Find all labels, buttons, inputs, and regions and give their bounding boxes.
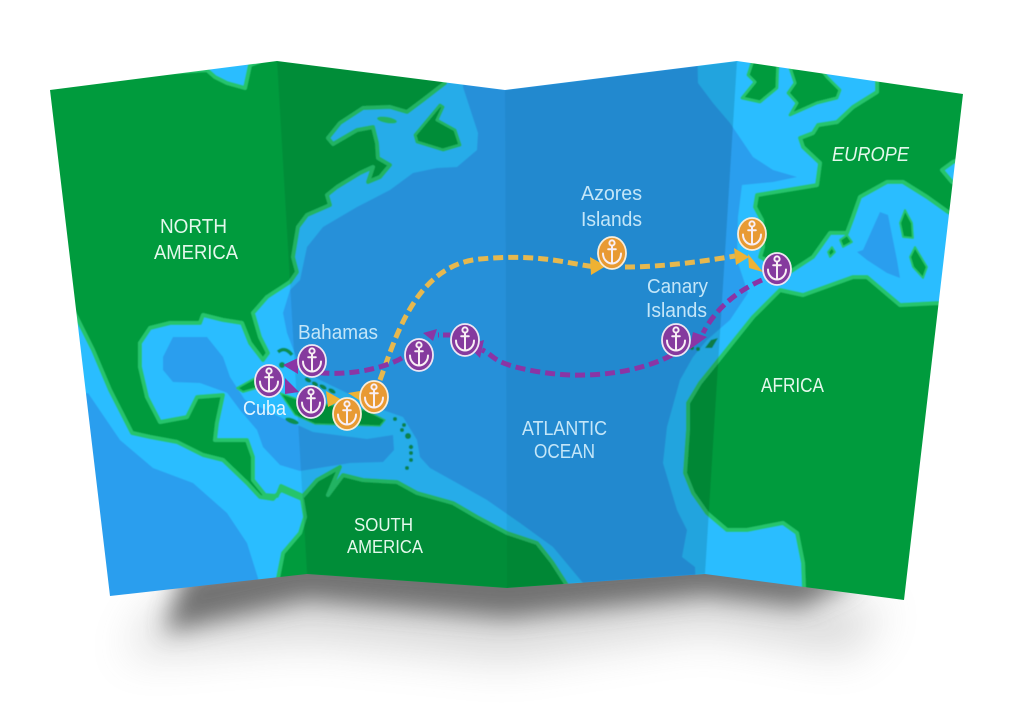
- label: Atlantic Ocean: [522, 418, 607, 463]
- shadow beneath map: [125, 545, 885, 660]
- label: Canary Islands: Canary: [647, 276, 708, 298]
- map sheet: [40, 40, 985, 615]
- deep water: Mediterranean: [857, 212, 900, 278]
- marker: Hispaniola gold: [333, 398, 361, 430]
- label: Azores Islands: [581, 183, 642, 231]
- land: Prince Edward Island: [376, 116, 398, 124]
- fold shading: panel 3: [505, 61, 737, 588]
- label: Atlantic Ocean: ATLANTIC: [522, 418, 607, 440]
- deep water: Pacific: [86, 393, 258, 596]
- marker: Hispaniola purple: [297, 386, 325, 418]
- marker: Azores: [598, 237, 626, 269]
- label: South America: SOUTH: [354, 515, 413, 535]
- deep water: Gulf of Mexico: [163, 337, 245, 400]
- land: Canary Islands: [690, 338, 718, 351]
- label: Atlantic Ocean: OCEAN: [534, 441, 595, 463]
- label: Canary Islands: [646, 276, 708, 322]
- land: Balearic Islands: [828, 235, 852, 257]
- label: Africa: AFRICA: [761, 375, 825, 397]
- shallow water base: [78, 61, 955, 587]
- fold shading: panel 2: [277, 61, 507, 588]
- route: outbound gold: [326, 248, 763, 407]
- marker: Spain purple: [763, 253, 791, 285]
- label: South America: AMERICA: [347, 537, 423, 557]
- folded map infographic: [50, 61, 963, 674]
- land: Newfoundland: [415, 105, 460, 150]
- marker: Caribbean gold: [360, 381, 388, 413]
- label: Cuba: Cuba: [243, 398, 287, 420]
- marker: Spain gold: [738, 218, 766, 250]
- marker: Cuba: [255, 365, 283, 397]
- marker: Bahamas: [298, 345, 326, 377]
- land: Bahamas and Caribbean islets: [278, 350, 413, 470]
- marker: mid-Atlantic purple west: [405, 339, 433, 371]
- land: the Americas: [40, 55, 570, 615]
- label: Bahamas: Bahamas: [298, 322, 378, 344]
- land: Hispaniola: [280, 393, 385, 426]
- marker: mid-Atlantic purple east: [451, 324, 479, 356]
- land: Europe: [752, 81, 963, 274]
- land: Ireland: [742, 60, 778, 102]
- land: Cuba: [237, 377, 257, 392]
- route: return purple: [283, 280, 762, 394]
- land: Africa: [682, 274, 939, 600]
- label: Canary Islands: Islands: [646, 300, 707, 322]
- label: North America: [154, 216, 239, 264]
- label: Europe: EUROPE: [832, 144, 910, 166]
- label: North America: AMERICA: [154, 242, 239, 264]
- label: Azores Islands: Azores: [581, 183, 642, 205]
- deep water: Atlantic: [283, 40, 797, 610]
- land: Great Britain: [788, 68, 840, 115]
- deep water: Caribbean: [225, 390, 394, 471]
- land: Corsica and Sardinia: [900, 210, 913, 238]
- label: South America: [347, 515, 423, 557]
- label: Azores Islands: Islands: [581, 209, 642, 231]
- marker: Canary Islands: [662, 324, 690, 356]
- label: North America: NORTH: [160, 216, 227, 238]
- land: Sicily: [910, 247, 927, 278]
